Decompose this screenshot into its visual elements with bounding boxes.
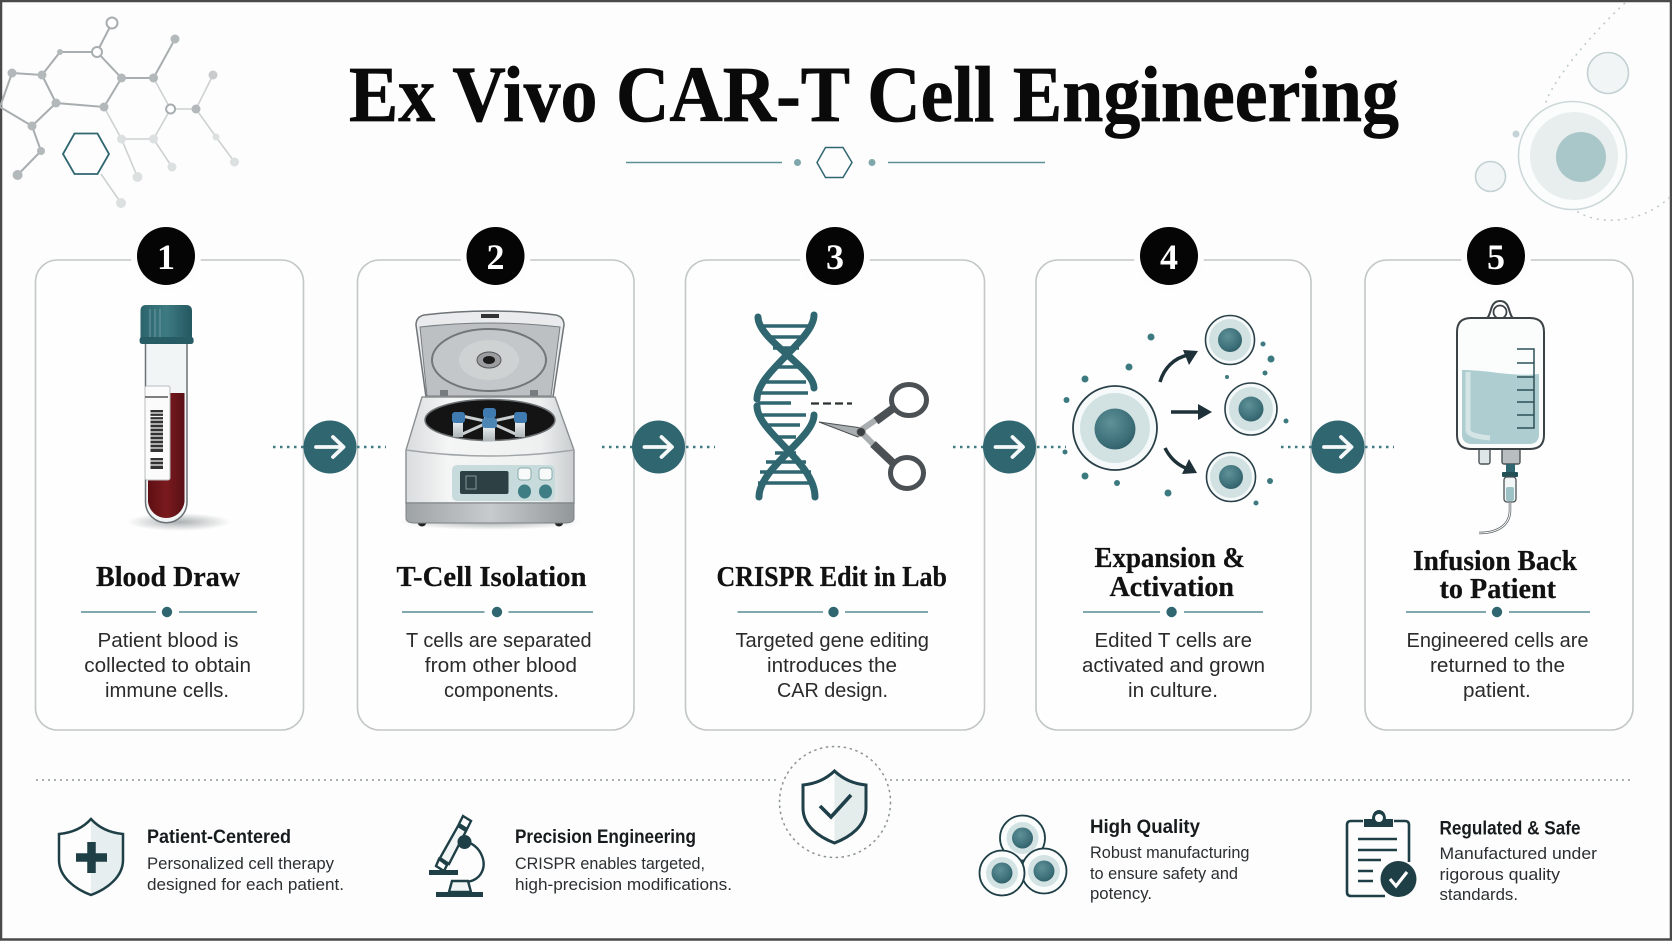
panel: step 2 T-cell isolation — [358, 260, 634, 730]
heading: Expansion & — [1094, 542, 1245, 574]
title divider — [626, 148, 1045, 178]
description: Edited T cells are — [1094, 630, 1252, 652]
title: Ex Vivo CAR-T Cell Engineering — [349, 52, 1399, 139]
description: Targeted gene editing — [736, 630, 929, 652]
feature: precision engineering — [429, 816, 732, 897]
heading: Activation — [1110, 571, 1234, 603]
feature text: Precision Engineering — [515, 827, 696, 848]
arrow 4 to 5 — [1281, 420, 1394, 474]
panel: step 5 infusion — [1365, 260, 1633, 730]
icon: DNA helix and scissors — [757, 315, 926, 497]
description — [736, 630, 929, 702]
number badge 2 — [460, 221, 530, 291]
badge: central shield — [780, 746, 890, 858]
feature: high quality — [980, 816, 1250, 903]
arrow 1 to 2 — [273, 420, 386, 474]
heading — [1094, 542, 1245, 603]
feature text: Manufactured under — [1440, 845, 1598, 863]
heading: Infusion Back — [1413, 545, 1578, 577]
number badge 1: 1 — [157, 237, 175, 277]
feature text: standards. — [1440, 886, 1518, 904]
icon: microscope — [429, 816, 484, 897]
card outline — [686, 260, 984, 730]
feature text — [1440, 818, 1598, 904]
icon: three cells — [980, 816, 1066, 896]
feature text: high-precision modifications. — [515, 876, 732, 894]
feature: patient-centered — [59, 819, 344, 895]
panel: step 1 blood draw — [36, 260, 304, 730]
feature text: Robust manufacturing — [1090, 844, 1250, 862]
feature text: to ensure safety and — [1090, 865, 1238, 883]
feature text: CRISPR enables targeted, — [515, 855, 705, 873]
feature text: potency. — [1090, 885, 1152, 903]
feature: regulated and safe — [1347, 810, 1598, 904]
card outline — [1036, 260, 1311, 730]
feature text: rigorous quality — [1440, 866, 1561, 884]
decoration: cells top right — [1476, 3, 1670, 220]
description: activated and grown — [1082, 655, 1265, 677]
description — [1082, 630, 1265, 702]
icon: shield with cross — [59, 819, 123, 895]
description: from other blood — [425, 655, 577, 677]
feature text: High Quality — [1090, 817, 1200, 838]
divider — [1406, 607, 1590, 617]
number badge 3: 3 — [826, 237, 844, 277]
divider — [402, 607, 593, 617]
panel: step 4 expansion and activation — [1036, 260, 1311, 730]
heading: Blood Draw — [96, 561, 240, 593]
icon: clipboard with check — [1347, 810, 1416, 897]
icon: IV bag — [1457, 301, 1544, 533]
feature text: Regulated & Safe — [1440, 818, 1580, 840]
description: introduces the — [767, 655, 897, 677]
arrow 3 to 4 — [953, 420, 1066, 474]
divider — [81, 607, 257, 617]
number badge 4 — [1134, 221, 1204, 291]
description: components. — [444, 680, 559, 702]
icon: centrifuge — [398, 311, 582, 530]
card outline — [1365, 260, 1633, 730]
heading: T-Cell Isolation — [396, 561, 586, 593]
divider — [738, 607, 928, 617]
feature text — [1090, 817, 1250, 903]
card outline — [36, 260, 304, 730]
feature text — [515, 827, 732, 894]
divider — [1083, 607, 1263, 617]
panel: step 3 CRISPR edit — [686, 260, 984, 730]
arrow 2 to 3 — [602, 420, 715, 474]
bottom dotted divider — [36, 779, 1634, 781]
number badge 4: 4 — [1160, 237, 1178, 277]
heading: to Patient — [1440, 573, 1556, 605]
description: patient. — [1463, 680, 1531, 702]
icon: cell expansion — [1062, 316, 1288, 506]
icon: blood tube — [127, 305, 231, 531]
description: in culture. — [1128, 680, 1218, 702]
feature text: designed for each patient. — [147, 876, 344, 894]
description — [406, 630, 592, 702]
description: returned to the — [1430, 655, 1565, 677]
number badge 2: 2 — [486, 237, 504, 277]
number badge 1 — [131, 221, 201, 291]
decoration: molecule network — [0, 18, 239, 208]
description — [1406, 630, 1588, 702]
description: immune cells. — [105, 680, 229, 702]
description: collected to obtain — [84, 655, 251, 677]
card outline — [358, 260, 634, 730]
description: Engineered cells are — [1406, 630, 1588, 652]
heading — [1413, 545, 1578, 605]
description: CAR design. — [777, 680, 888, 702]
feature text: Patient-Centered — [147, 827, 291, 848]
number badge 3 — [800, 221, 870, 291]
description: T cells are separated — [406, 630, 592, 652]
feature text — [147, 827, 344, 894]
description — [84, 630, 251, 702]
heading: CRISPR Edit in Lab — [716, 561, 947, 593]
number badge 5 — [1461, 221, 1531, 291]
feature text: Personalized cell therapy — [147, 855, 335, 873]
description: Patient blood is — [98, 630, 238, 652]
number badge 5: 5 — [1487, 237, 1505, 277]
